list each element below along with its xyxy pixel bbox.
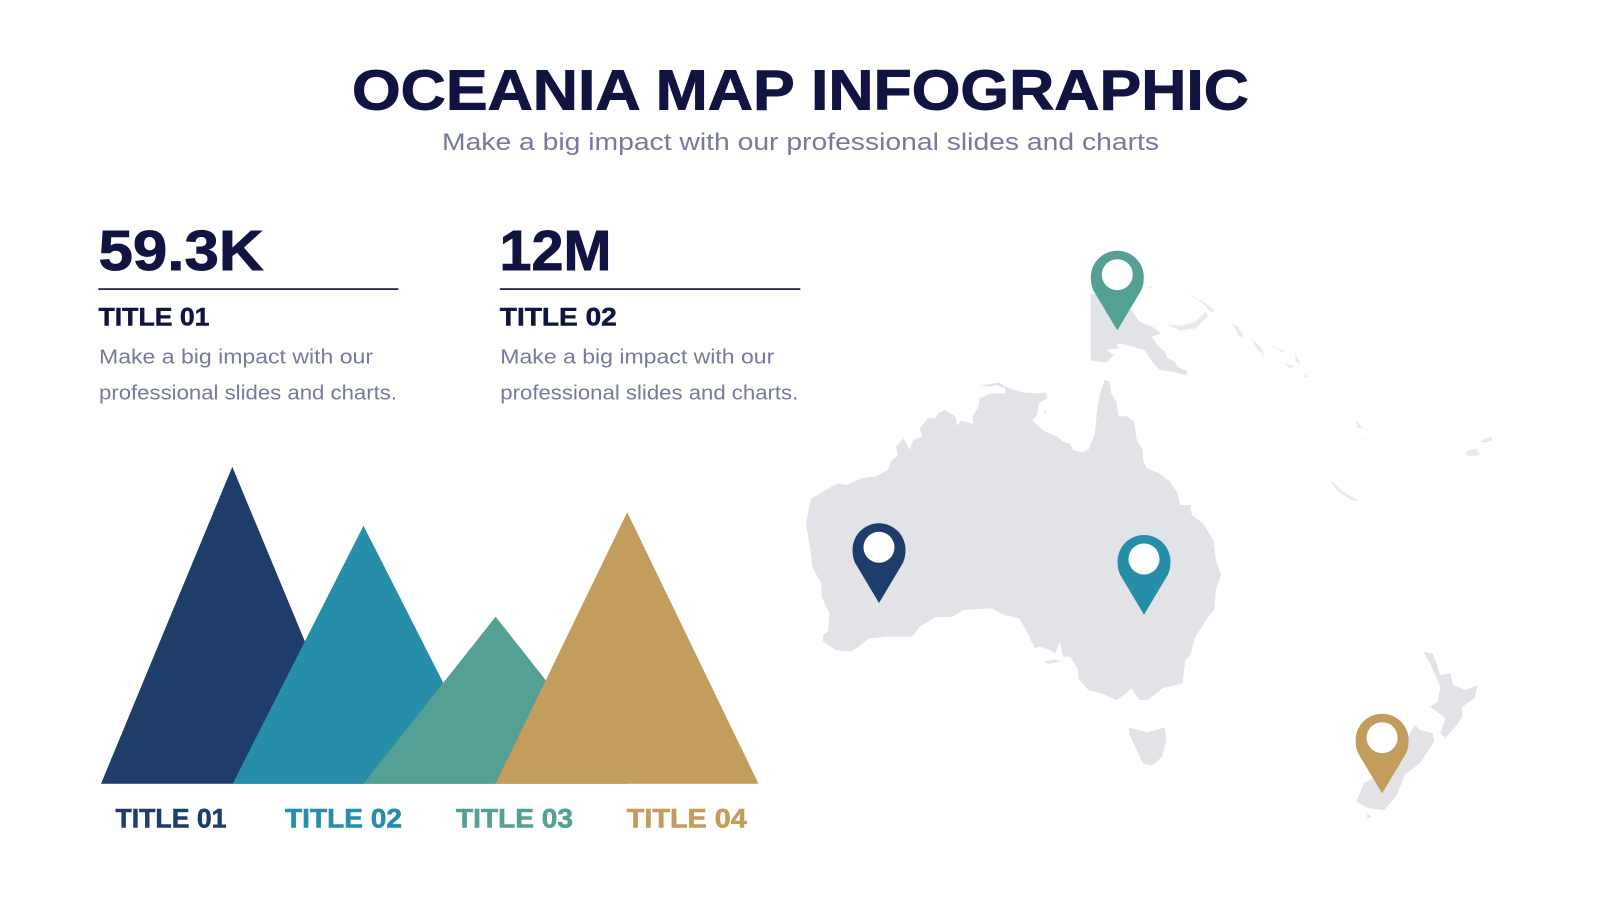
stat value 1: 59.3K bbox=[98, 219, 264, 283]
map: Pacific islands bbox=[1148, 287, 1581, 502]
map of Oceania bbox=[806, 287, 1581, 818]
map: Kangaroo Island and Groote Eylandt bbox=[1044, 410, 1060, 664]
stat block 1 bbox=[98, 219, 398, 404]
stat description 2: professional slides and charts. bbox=[500, 382, 798, 404]
pin: teal bbox=[1118, 535, 1170, 615]
map: Australia bbox=[806, 380, 1221, 700]
triangle: title 04 bbox=[496, 512, 758, 784]
stat block 2 bbox=[500, 219, 800, 404]
stat title 1: TITLE 01 bbox=[98, 304, 210, 332]
map: Stewart Island bbox=[1367, 813, 1371, 818]
stat description 2 bbox=[500, 346, 798, 404]
stat description 1: Make a big impact with our bbox=[99, 346, 373, 368]
chart label: title 04: TITLE 04 bbox=[627, 804, 747, 834]
triangle: title 02 bbox=[233, 526, 494, 784]
stat description 1: professional slides and charts. bbox=[99, 382, 397, 404]
pin: navy bbox=[852, 523, 906, 603]
pin: gold bbox=[1356, 714, 1409, 793]
chart label: title 01: TITLE 01 bbox=[116, 804, 226, 834]
map: Tasmania bbox=[1129, 727, 1166, 766]
stat divider 2 bbox=[500, 288, 800, 290]
stat title 2: TITLE 02 bbox=[500, 304, 617, 332]
triangle: title 03 bbox=[364, 617, 628, 784]
map: New Zealand south island bbox=[1356, 725, 1434, 810]
subtitle: Make a big impact with our professional slides and charts bbox=[442, 129, 1159, 156]
map: New Zealand north island bbox=[1423, 652, 1478, 738]
chart label: title 03: TITLE 03 bbox=[456, 804, 573, 834]
stat divider 1 bbox=[98, 288, 398, 290]
stat description 2: Make a big impact with our bbox=[500, 346, 775, 368]
triangle: title 01 bbox=[101, 467, 364, 784]
stat value 2: 12M bbox=[500, 219, 612, 283]
title: OCEANIA MAP INFOGRAPHIC bbox=[352, 58, 1249, 122]
triangle chart bbox=[101, 467, 758, 784]
chart label: title 02: TITLE 02 bbox=[285, 804, 402, 834]
map: New Guinea bbox=[1091, 294, 1188, 375]
pin: green bbox=[1091, 251, 1144, 330]
stat description 1 bbox=[99, 346, 397, 404]
